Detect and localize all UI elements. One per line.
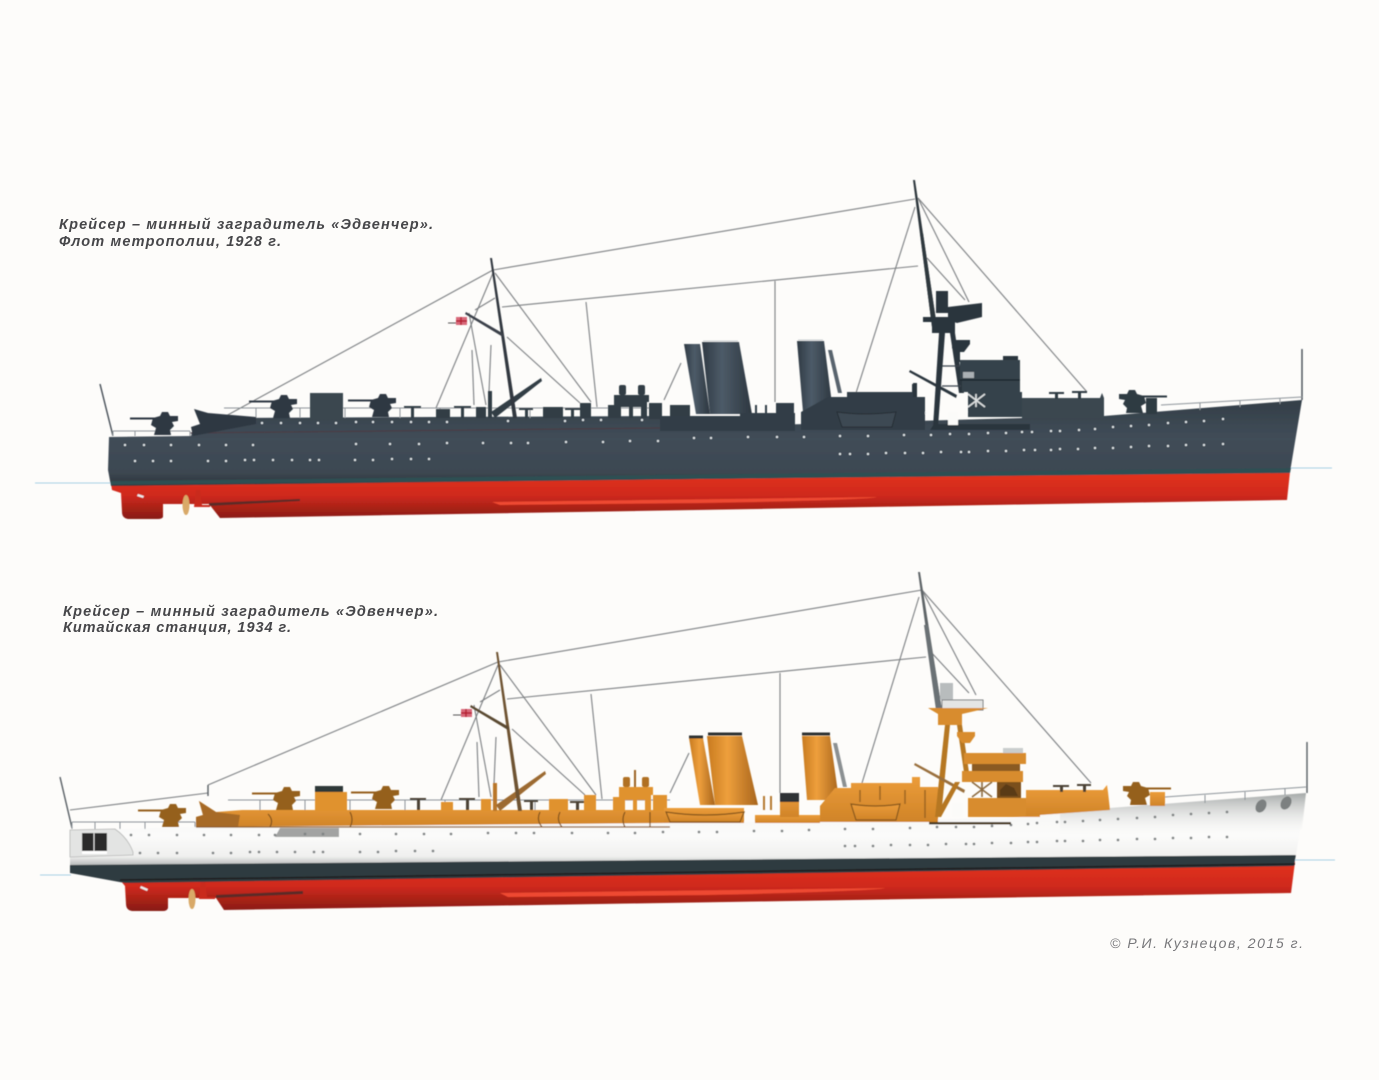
black boot-topping	[70, 854, 1296, 883]
white hull	[70, 793, 1306, 865]
caption: ship 1934: Крейсер – минный заградитель «Эдвенчер».	[63, 604, 438, 620]
caption: ship 1928: Крейсер – минный заградитель «Эдвенчер».	[59, 217, 433, 233]
forward deckhouse	[1026, 784, 1165, 816]
caption: ship 1928: Флот метрополии, 1928 г.	[59, 234, 281, 250]
foremast, director and bridge	[914, 572, 1040, 817]
rigging	[70, 590, 1091, 810]
bilge keel	[492, 497, 877, 505]
portholes	[125, 409, 1223, 461]
midship deck fittings	[404, 378, 690, 419]
caption: ship 1934: Китайская станция, 1934 г.	[63, 620, 291, 636]
bilge keel	[500, 888, 885, 897]
aft gun and poop	[130, 393, 396, 436]
ship side view: China Station 1934, white and buff	[40, 572, 1335, 911]
rigging	[224, 198, 1087, 417]
red underwater hull	[120, 862, 1295, 911]
deck rails	[72, 787, 1306, 829]
midship deckhouses and boats	[664, 777, 938, 823]
main mast with gaff and ensign	[448, 258, 517, 418]
grey side patch	[275, 828, 339, 837]
forward deckhouse and gun	[1022, 390, 1167, 418]
midship deck fittings	[315, 770, 667, 811]
red underwater hull	[111, 472, 1290, 519]
bow shading	[1060, 793, 1306, 835]
propeller and shaft	[137, 490, 300, 515]
anchors	[1253, 794, 1294, 815]
dark deck edge under bridge	[929, 822, 1011, 824]
stern shelter	[70, 829, 133, 857]
stern and bow staffs	[60, 742, 1307, 828]
waterline marks	[35, 468, 1332, 483]
caption: ship 1928	[59, 217, 433, 250]
funnels	[684, 340, 842, 414]
foremast, director and bridge	[909, 180, 1030, 430]
ship side view: Home Fleet 1928, dark grey	[35, 180, 1332, 519]
boot-topping band	[111, 468, 1291, 485]
propeller and shaft	[140, 880, 303, 909]
caption: ship 1934	[63, 604, 438, 636]
upper hull	[108, 400, 1302, 486]
aft deck rail	[113, 397, 1302, 436]
stern and bow staffs	[100, 349, 1302, 436]
waterline marks	[40, 860, 1335, 875]
portholes	[131, 812, 1227, 853]
buff superstructure aft	[196, 801, 670, 827]
midship deckhouses and boats	[660, 384, 925, 431]
copyright credit: © Р.И. Кузнецов, 2015 г.	[1110, 935, 1303, 951]
main mast with gaff and ensign	[453, 652, 522, 811]
guns and fittings	[138, 782, 1171, 827]
funnels	[689, 734, 847, 805]
